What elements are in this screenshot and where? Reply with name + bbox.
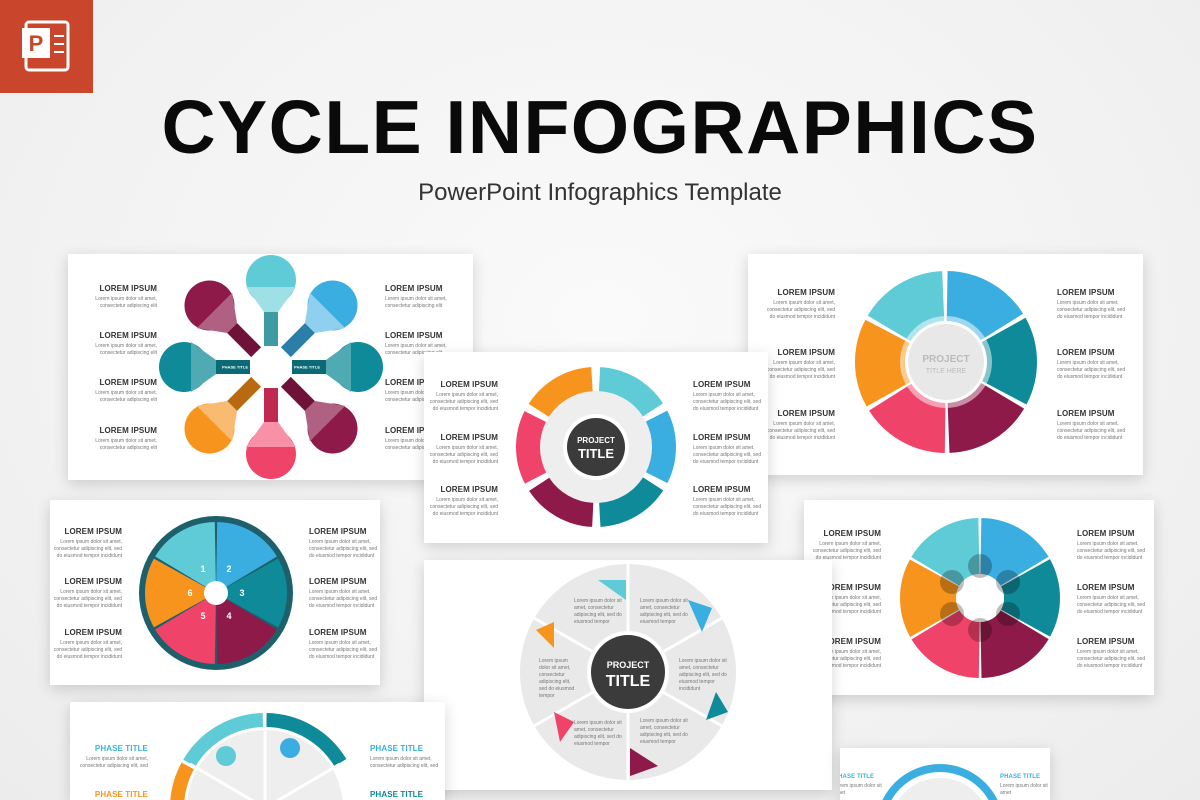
slide: donut with project title here: Lorem ipsum dolor sit amet, consectetur adipiscing elit, sed do eiusmod tempor incididunt <box>767 300 835 320</box>
slide: donut with project title here: Lorem ipsum dolor sit amet, consectetur adipiscing elit, sed do eiusmod tempor incididunt <box>767 421 835 441</box>
slide: segmented cycle right: Lorem ipsum dolor sit amet, consectetur adipiscing elit, sed do eiusmod tempor incididunt <box>1077 541 1145 561</box>
slide: ring with dark center: LOREM IPSUM <box>693 485 751 494</box>
slide: donut with project title here: PROJECT <box>922 354 970 365</box>
slide: numbered pie: 1 <box>200 564 206 574</box>
slide: small arc bottom-right: PHASE TITLE <box>1000 774 1040 780</box>
slide: phase title arc bottom-left: PHASE TITLE <box>370 790 423 799</box>
slide: numbered pie: Lorem ipsum dolor sit amet, consectetur adipiscing elit, sed do eiusmod tempor incididunt <box>54 589 122 609</box>
slide: ring with dark center: PROJECT <box>577 436 615 445</box>
slide: small arc bottom-right <box>840 748 1050 800</box>
slide: segmented cycle right: Lorem ipsum dolor sit amet, consectetur adipiscing elit, sed do eiusmod tempor incididunt <box>813 595 881 615</box>
slide: donut with project title here <box>748 254 1143 475</box>
slide: gray wheel with text sectors <box>424 560 832 790</box>
slide: phase title arc bottom-left: Lorem ipsum dolor sit amet, consectetur adipiscing elit, sed <box>370 756 438 769</box>
slide: gray wheel with text sectors: Lorem ipsum dolor sit amet, consectetur adipiscing elit, sed do eiusmod tempor <box>640 598 688 625</box>
slide: flower petals: Lorem ipsum dolor sit amet, consectetur adipiscing elit <box>385 438 447 451</box>
slide: numbered pie: Lorem ipsum dolor sit amet, consectetur adipiscing elit, sed do eiusmod tempor incididunt <box>309 589 377 609</box>
slide: flower petals: Lorem ipsum dolor sit amet, consectetur adipiscing elit <box>385 390 447 403</box>
slide: numbered pie: LOREM IPSUM <box>64 577 122 586</box>
slide: flower petals: Lorem ipsum dolor sit amet, consectetur adipiscing elit <box>95 343 157 356</box>
slide: numbered pie <box>50 500 380 685</box>
slide: ring with dark center <box>424 352 768 543</box>
slide: ring with dark center: LOREM IPSUM <box>693 380 751 389</box>
slide: numbered pie: Lorem ipsum dolor sit amet, consectetur adipiscing elit, sed do eiusmod tempor incididunt <box>309 539 377 559</box>
slide: gray wheel with text sectors: PROJECT <box>607 660 650 670</box>
slide: numbered pie: LOREM IPSUM <box>309 628 367 637</box>
slide: segmented cycle right: Lorem ipsum dolor sit amet, consectetur adipiscing elit, sed do eiusmod tempor incididunt <box>813 541 881 561</box>
slide: flower petals: Lorem ipsum dolor sit amet, consectetur adipiscing elit <box>385 296 447 309</box>
slide: donut with project title here: TITLE HERE <box>926 368 967 375</box>
slide: gray wheel with text sectors: Lorem ipsum dolor sit amet, consectetur adipiscing elit, sed do eiusmod tempor <box>640 718 688 745</box>
slide: gray wheel with text sectors: TITLE <box>606 673 651 690</box>
slide: donut with project title here: Lorem ipsum dolor sit amet, consectetur adipiscing elit, sed do eiusmod tempor incididunt <box>767 360 835 380</box>
slide: numbered pie: LOREM IPSUM <box>309 527 367 536</box>
slide: donut with project title here: Lorem ipsum dolor sit amet, consectetur adipiscing elit, sed do eiusmod tempor incididunt <box>1057 300 1125 320</box>
slide: segmented cycle right <box>804 500 1154 695</box>
slide: ring with dark center: Lorem ipsum dolor sit amet, consectetur adipiscing elit, sed do eiusmod tempor incididunt <box>430 392 498 412</box>
slide: flower petals <box>68 254 473 480</box>
slide: ring with dark center: TITLE <box>578 446 614 461</box>
slide: flower petals: Lorem ipsum dolor sit amet, consectetur adipiscing elit <box>385 343 447 356</box>
slide: flower petals: LOREM IPSUM <box>99 331 157 340</box>
slide: phase title arc bottom-left: PHASE TITLE <box>370 744 423 753</box>
slide: flower petals: LOREM IPSUM <box>385 426 443 435</box>
subtitle: PowerPoint Infographics Template <box>418 179 782 206</box>
slide: flower petals: LOREM IPSUM <box>385 284 443 293</box>
slide: ring with dark center: LOREM IPSUM <box>440 433 498 442</box>
slide: flower petals: Lorem ipsum dolor sit amet, consectetur adipiscing elit <box>95 390 157 403</box>
slide: phase title arc bottom-left <box>70 702 445 800</box>
slide: ring with dark center: Lorem ipsum dolor sit amet, consectetur adipiscing elit, sed do eiusmod tempor incididunt <box>693 392 761 412</box>
slide: numbered pie: Lorem ipsum dolor sit amet, consectetur adipiscing elit, sed do eiusmod tempor incididunt <box>54 539 122 559</box>
slide: donut with project title here: LOREM IPSUM <box>777 288 835 297</box>
icon: powerpoint logo: P <box>29 31 43 56</box>
slide: ring with dark center: LOREM IPSUM <box>440 485 498 494</box>
slide: gray wheel with text sectors: Lorem ipsum dolor sit amet, consectetur adipiscing elit, sed do eiusmod tempor <box>574 720 622 747</box>
slide: segmented cycle right: LOREM IPSUM <box>1077 583 1135 592</box>
slide: flower petals: LOREM IPSUM <box>99 426 157 435</box>
slide: numbered pie: LOREM IPSUM <box>64 527 122 536</box>
slide: segmented cycle right: Lorem ipsum dolor sit amet, consectetur adipiscing elit, sed do eiusmod tempor incididunt <box>1077 595 1145 615</box>
slide: gray wheel with text sectors: Lorem ipsum dolor sit amet, consectetur adipiscing elit, sed do eiusmod tempor <box>539 658 574 699</box>
slide: ring with dark center: Lorem ipsum dolor sit amet, consectetur adipiscing elit, sed do eiusmod tempor incididunt <box>693 497 761 517</box>
title: CYCLE INFOGRAPHICS <box>161 85 1039 169</box>
slide: numbered pie: 5 <box>200 611 206 621</box>
slide: segmented cycle right: LOREM IPSUM <box>823 637 881 646</box>
slide: flower petals: PHASE TITLE <box>294 364 320 370</box>
slide: flower petals: LOREM IPSUM <box>99 378 157 387</box>
slide: numbered pie: LOREM IPSUM <box>64 628 122 637</box>
slide: donut with project title here: Lorem ipsum dolor sit amet, consectetur adipiscing elit, sed do eiusmod tempor incididunt <box>1057 421 1125 441</box>
slide: segmented cycle right: LOREM IPSUM <box>823 529 881 538</box>
icon: powerpoint logo <box>0 0 93 93</box>
slide: donut with project title here: LOREM IPSUM <box>1057 409 1115 418</box>
slide: donut with project title here: Lorem ipsum dolor sit amet, consectetur adipiscing elit, sed do eiusmod tempor incididunt <box>1057 360 1125 380</box>
slide: ring with dark center: LOREM IPSUM <box>693 433 751 442</box>
slide: segmented cycle right: Lorem ipsum dolor sit amet, consectetur adipiscing elit, sed do eiusmod tempor incididunt <box>813 649 881 669</box>
slide: numbered pie: 3 <box>239 588 245 598</box>
slide: ring with dark center: Lorem ipsum dolor sit amet, consectetur adipiscing elit, sed do eiusmod tempor incididunt <box>430 497 498 517</box>
slide: flower petals: LOREM IPSUM <box>385 331 443 340</box>
slide: flower petals: LOREM IPSUM <box>99 284 157 293</box>
slide: flower petals: LOREM IPSUM <box>385 378 443 387</box>
slide: segmented cycle right: LOREM IPSUM <box>1077 637 1135 646</box>
slide: gray wheel with text sectors: Lorem ipsum dolor sit amet, consectetur adipiscing elit, sed do eiusmod tempor <box>574 598 622 625</box>
slide: segmented cycle right: LOREM IPSUM <box>1077 529 1135 538</box>
slide: donut with project title here: LOREM IPSUM <box>1057 288 1115 297</box>
slide: ring with dark center: LOREM IPSUM <box>440 380 498 389</box>
slide: donut with project title here: LOREM IPSUM <box>777 348 835 357</box>
slide: numbered pie: 4 <box>226 611 232 621</box>
slide: flower petals: PHASE TITLE <box>222 364 248 370</box>
slide: phase title arc bottom-left: PHASE TITLE <box>95 790 148 799</box>
slide: flower petals: Lorem ipsum dolor sit amet, consectetur adipiscing elit <box>95 296 157 309</box>
slide: donut with project title here: LOREM IPSUM <box>777 409 835 418</box>
slide: numbered pie: 2 <box>226 564 232 574</box>
slide: phase title arc bottom-left: Lorem ipsum dolor sit amet, consectetur adipiscing elit, sed <box>80 756 148 769</box>
slide: segmented cycle right: LOREM IPSUM <box>823 583 881 592</box>
slide: numbered pie: Lorem ipsum dolor sit amet, consectetur adipiscing elit, sed do eiusmod tempor incididunt <box>54 640 122 660</box>
slide: flower petals: Lorem ipsum dolor sit amet, consectetur adipiscing elit <box>95 438 157 451</box>
slide: small arc bottom-right: Lorem ipsum dolor sit amet <box>1000 783 1048 796</box>
slide: numbered pie: 6 <box>187 588 193 598</box>
slide: phase title arc bottom-left: PHASE TITLE <box>95 744 148 753</box>
slide: ring with dark center: Lorem ipsum dolor sit amet, consectetur adipiscing elit, sed do eiusmod tempor incididunt <box>693 445 761 465</box>
slide: numbered pie: Lorem ipsum dolor sit amet, consectetur adipiscing elit, sed do eiusmod tempor incididunt <box>309 640 377 660</box>
slide: gray wheel with text sectors: Lorem ipsum dolor sit amet, consectetur adipiscing elit, sed do eiusmod tempor incididunt <box>679 658 727 692</box>
slide: ring with dark center: Lorem ipsum dolor sit amet, consectetur adipiscing elit, sed do eiusmod tempor incididunt <box>430 445 498 465</box>
slide: numbered pie: LOREM IPSUM <box>309 577 367 586</box>
slide: segmented cycle right: Lorem ipsum dolor sit amet, consectetur adipiscing elit, sed do eiusmod tempor incididunt <box>1077 649 1145 669</box>
slide: donut with project title here: LOREM IPSUM <box>1057 348 1115 357</box>
